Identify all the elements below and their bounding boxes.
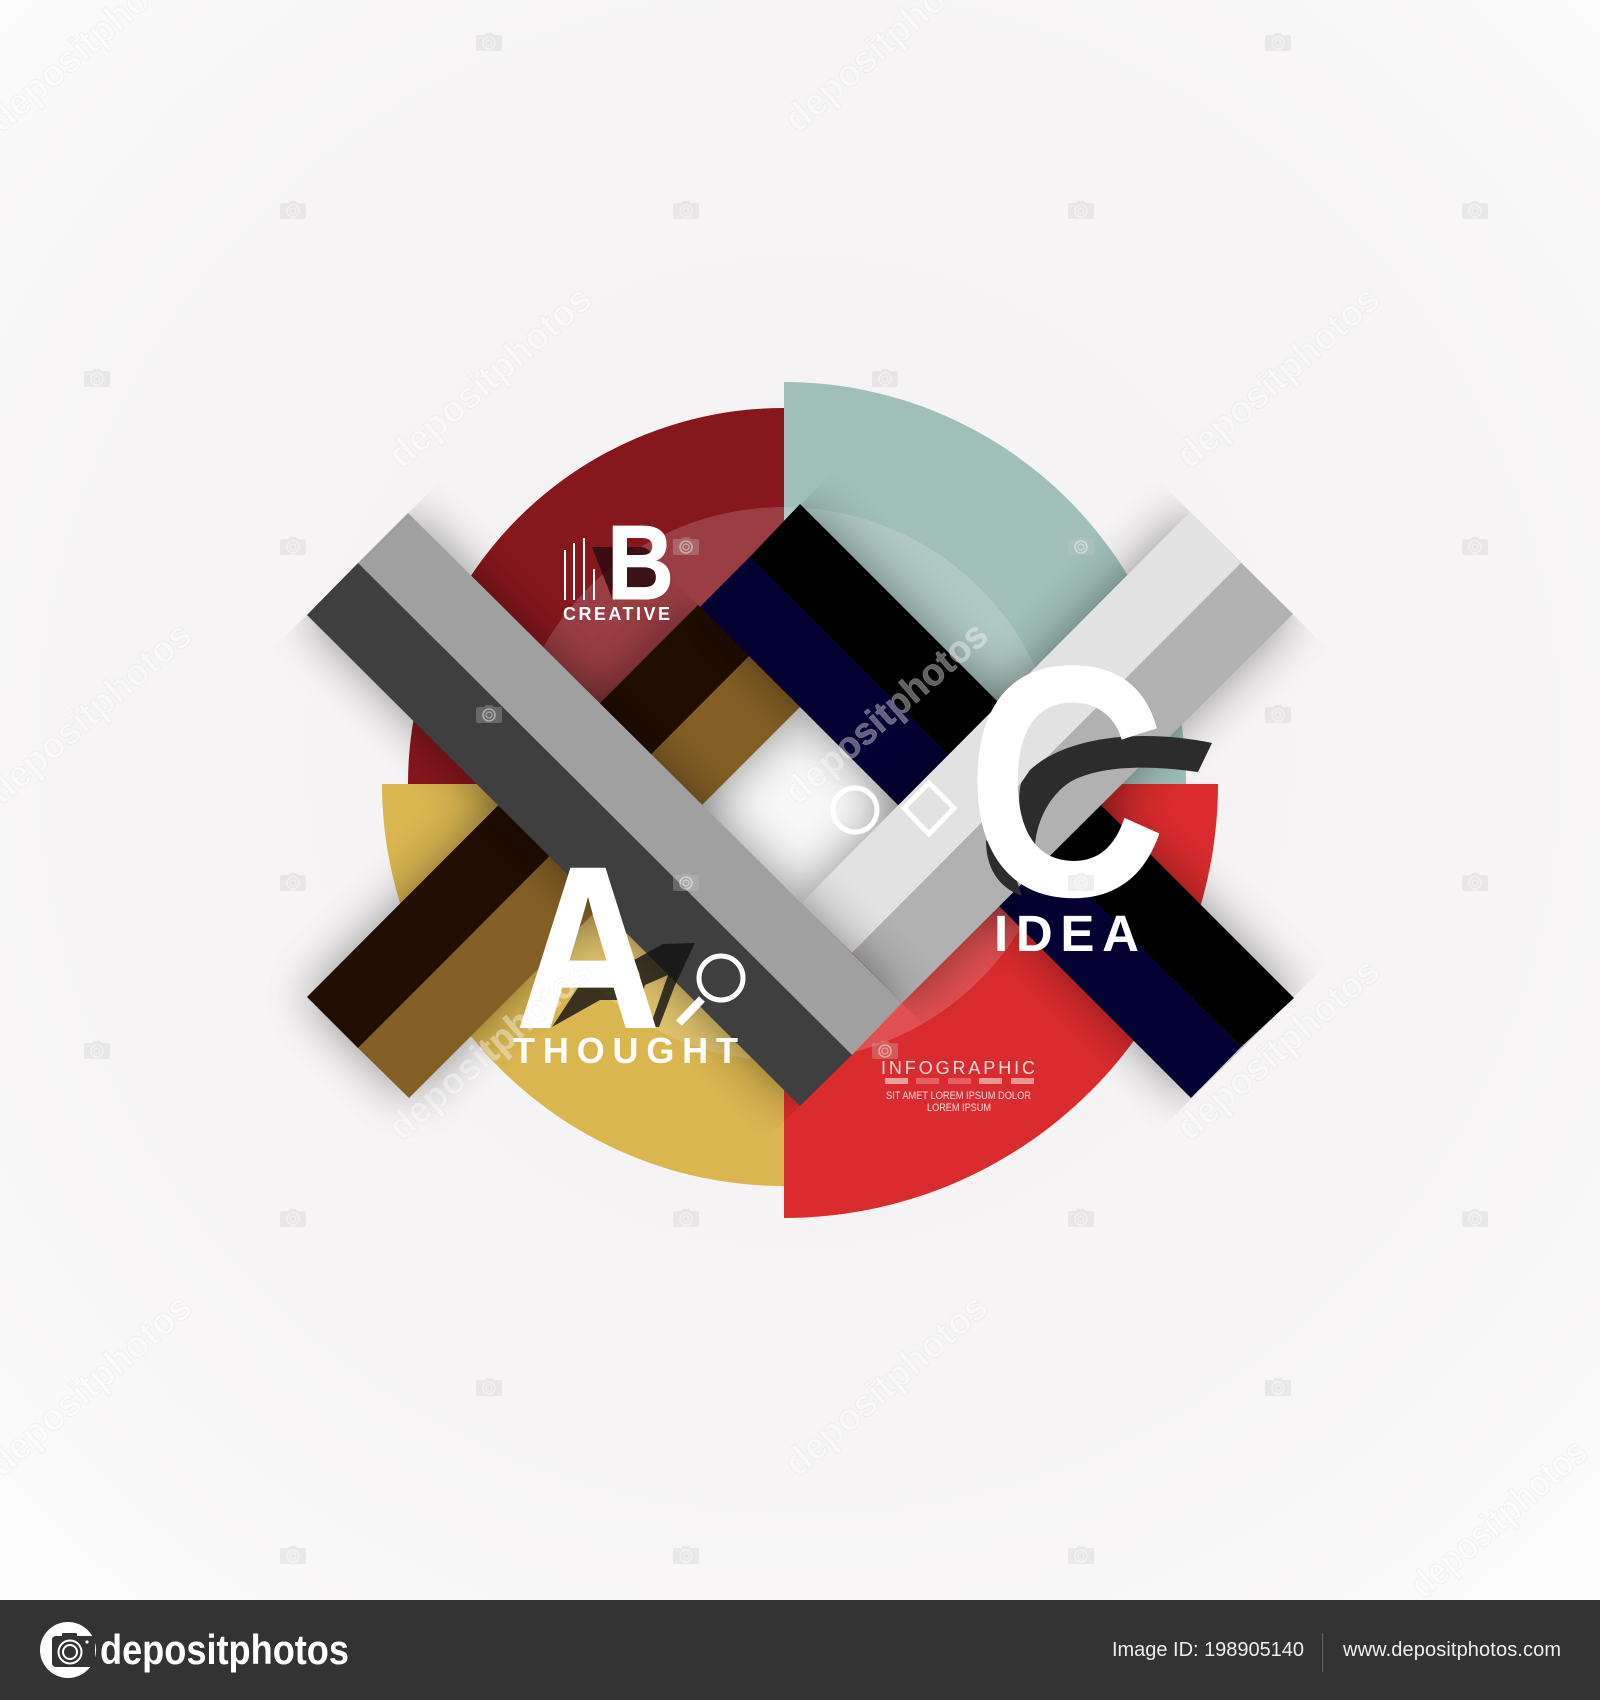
- watermarks: depositphotos: [776, 1286, 996, 1485]
- icon: camera logo: [40, 1622, 96, 1678]
- quadrant: maroon: [408, 408, 784, 784]
- ribbon: brown: [307, 605, 800, 1098]
- label INFOGRAPHIC: INFOGRAPHIC: [881, 1058, 1035, 1078]
- section C: idea: [966, 597, 1212, 965]
- section: infographic caption: [881, 1058, 1035, 1114]
- icon: diamond outline: [904, 783, 954, 834]
- icon: circle outline: [833, 788, 877, 832]
- website address: www.depositphotos.com: [1342, 1639, 1561, 1661]
- quadrant: teal: [784, 382, 1186, 784]
- ribbon: navy and black: [700, 504, 1294, 1098]
- separator: [1322, 1633, 1323, 1672]
- watermarks: depositphotos: [380, 950, 600, 1149]
- watermarks: depositphotos: [1168, 278, 1388, 477]
- glass inner circle: [507, 507, 1061, 1061]
- icon: vertical bars: [564, 538, 595, 600]
- ribbon: dark grey: [307, 513, 902, 1106]
- letter shadow B: [592, 547, 656, 598]
- watermarks: depositphotos: [380, 278, 600, 477]
- letter shadow A: [552, 943, 695, 1027]
- ribbon: light grey: [801, 512, 1293, 1003]
- letter A: A: [516, 819, 660, 1076]
- quadrant: gold: [382, 784, 784, 1186]
- icon: magnifier: [679, 956, 743, 1023]
- letter C: C: [966, 597, 1167, 965]
- label CREATIVE: CREATIVE: [563, 604, 670, 624]
- quadrant: red: [784, 784, 1218, 1218]
- caption strips: [885, 1078, 1034, 1084]
- label IDEA: IDEA: [994, 905, 1139, 962]
- section B: creative: [563, 504, 674, 624]
- section A: thought: [513, 819, 743, 1076]
- letter B: B: [607, 504, 674, 622]
- label THOUGHT: THOUGHT: [513, 1030, 738, 1071]
- centre diamond opening: [700, 705, 900, 904]
- footer bar: [0, 1600, 1600, 1700]
- letter shadow C: [986, 736, 1212, 896]
- logo wordmark: depositphotos: [100, 1626, 349, 1673]
- watermarks: depositphotos: [1168, 950, 1388, 1149]
- caption text line 1: SIT AMET LOREM IPSUM DOLOR: [886, 1090, 1031, 1102]
- watermarks: depositphotos: [776, 614, 996, 813]
- image id: Image ID: 198905140: [1112, 1639, 1304, 1661]
- watermark camera icons: [84, 33, 1488, 1564]
- circle quadrants: [382, 382, 1218, 1218]
- caption text line 2: LOREM IPSUM: [927, 1102, 991, 1114]
